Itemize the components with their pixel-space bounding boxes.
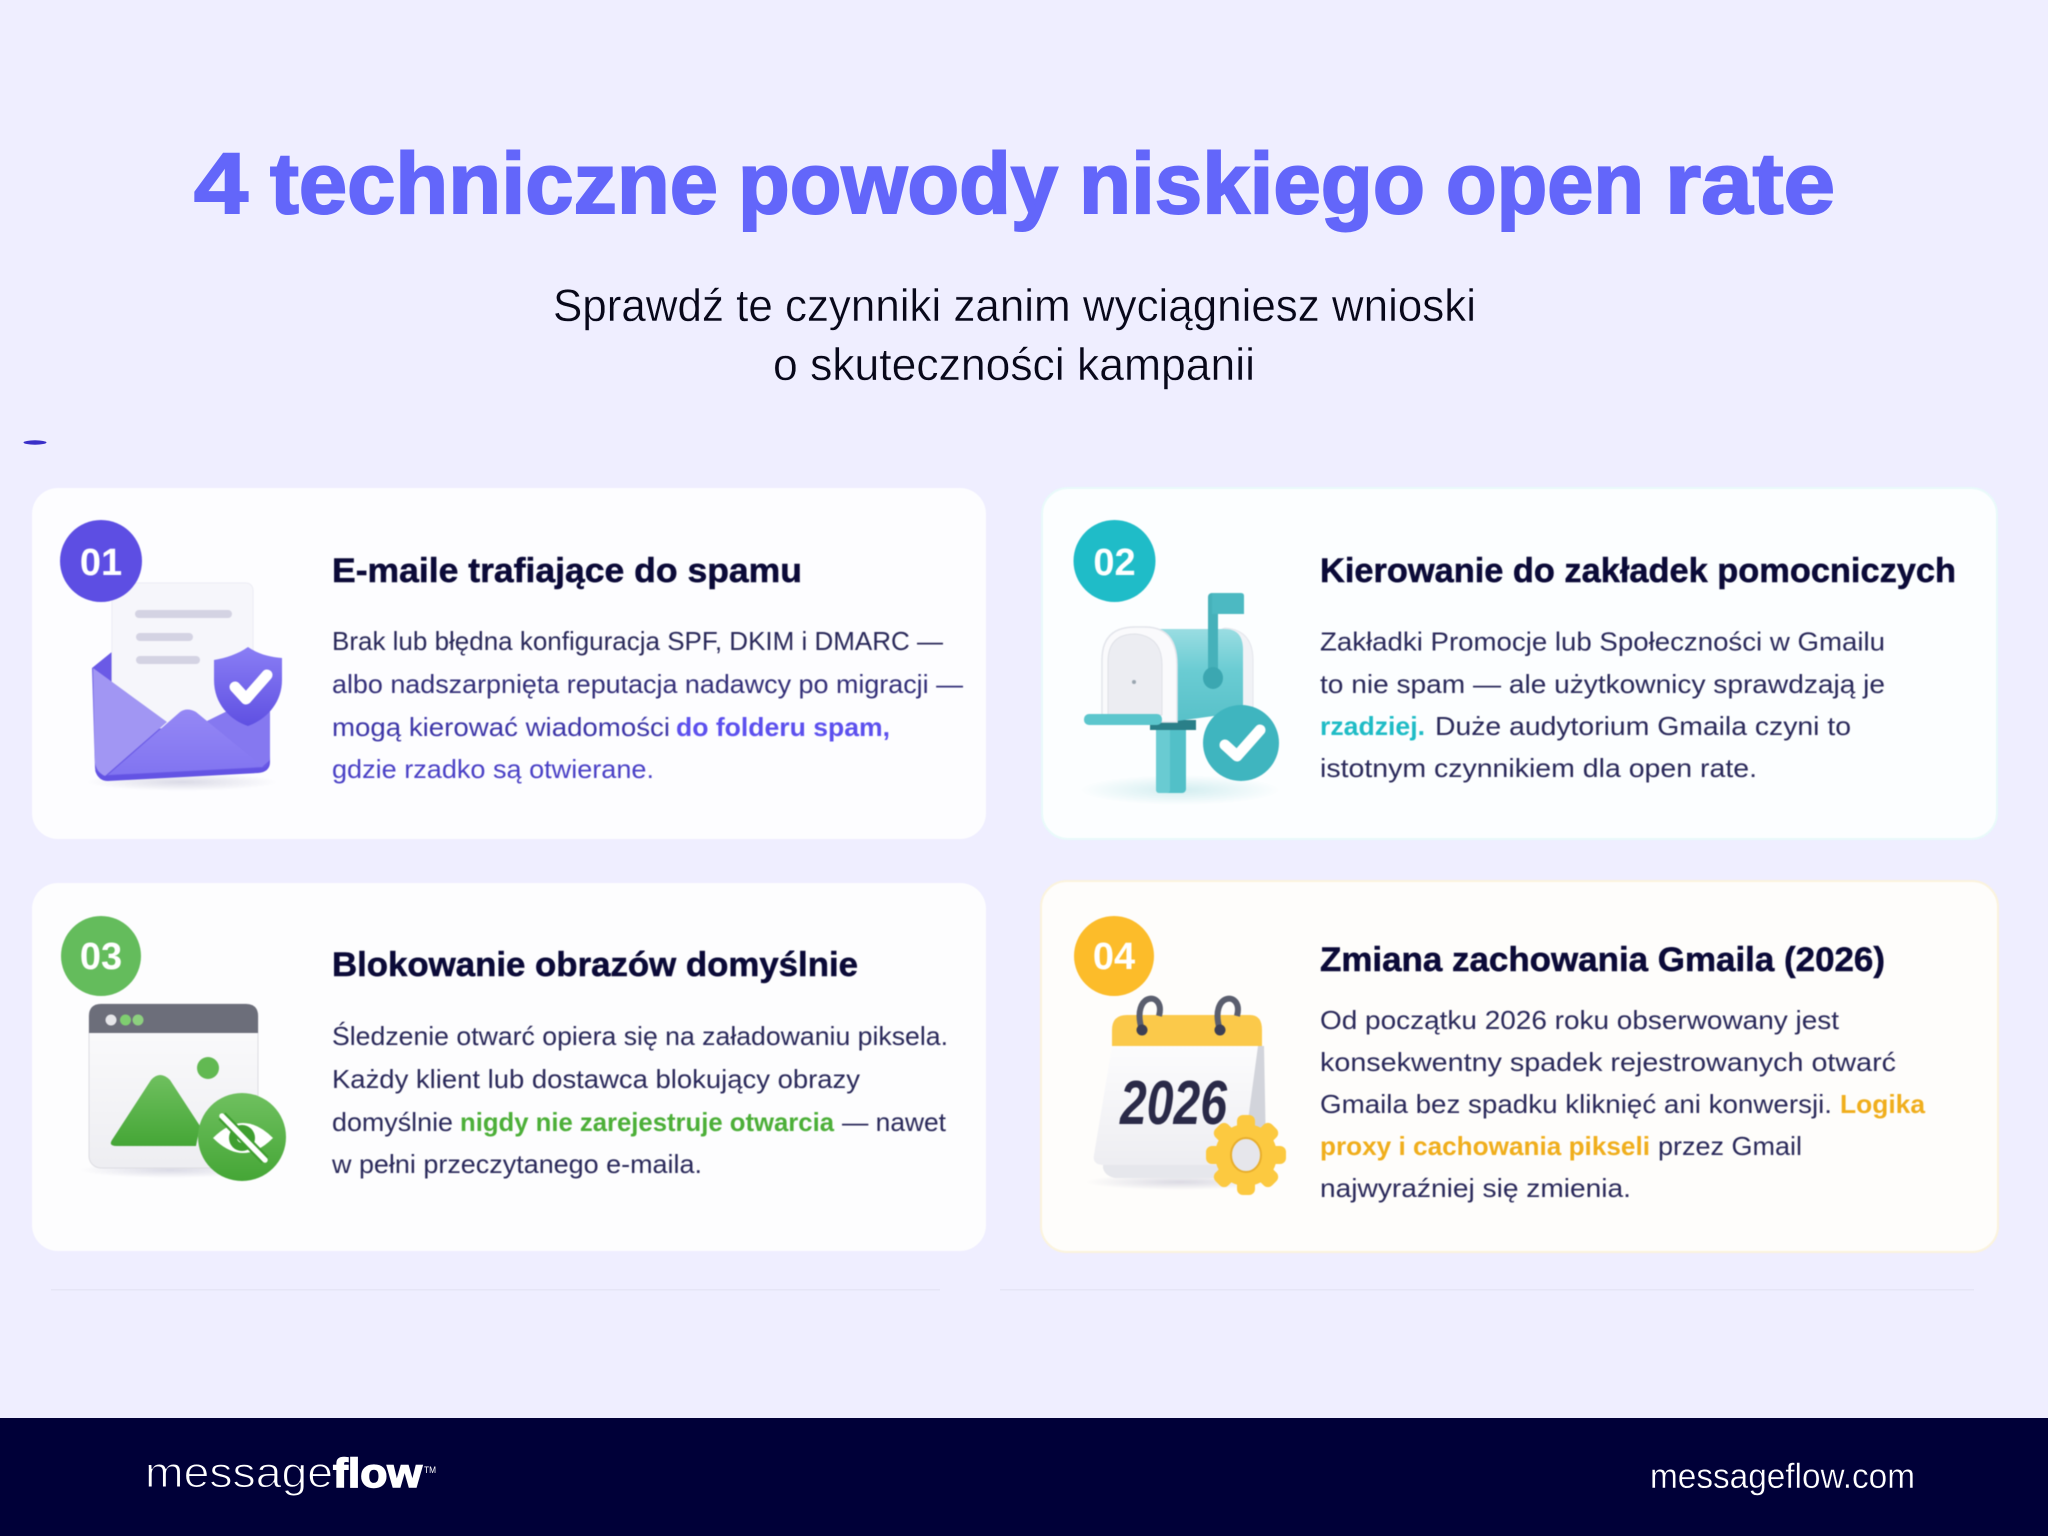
footer bar bbox=[0, 1418, 2048, 1536]
title: niskiego bbox=[1079, 136, 1425, 232]
body text 03: Każdy klient lub dostawca blokujący obrazy bbox=[332, 1064, 860, 1094]
panel: card 01 spam bbox=[32, 488, 986, 839]
subtitle: Sprawdź te czynniki zanim wyciągniesz wnioski bbox=[553, 280, 1476, 331]
body text 02: Duże audytorium Gmaila czyni to bbox=[1435, 711, 1851, 741]
title: open bbox=[1446, 136, 1644, 232]
subtitle bbox=[553, 280, 1476, 390]
icon: mailbox with check bbox=[1080, 593, 1280, 805]
title: 4 bbox=[194, 136, 248, 232]
subtitle: o skuteczności kampanii bbox=[773, 339, 1255, 390]
icon: calendar 2026 with gear: 2026 bbox=[1119, 1069, 1227, 1138]
body text 04: Od początku 2026 roku obserwowany jest bbox=[1320, 1005, 1840, 1035]
heading 03: Blokowanie obrazów domyślnie bbox=[332, 946, 858, 984]
number badge 01: 01 bbox=[80, 542, 122, 584]
heading 01: E-maile trafiające do spamu bbox=[332, 552, 802, 590]
number badge 04 bbox=[1074, 916, 1154, 996]
body text 04: konsekwentny spadek rejestrowanych otwarć bbox=[1320, 1047, 1896, 1077]
body text 02: Zakładki Promocje lub Społeczności w Gmailu bbox=[1320, 626, 1885, 656]
body text 03 bbox=[331, 1021, 948, 1179]
panel: card 04 gmail bbox=[1041, 881, 1998, 1252]
body text 04: Gmaila bez spadku kliknięć ani konwersji. bbox=[1320, 1089, 1832, 1119]
body text 03: — nawet bbox=[842, 1107, 947, 1137]
body text 02 bbox=[1320, 626, 1885, 783]
body text 04: proxy i cachowania pikseli bbox=[1320, 1131, 1650, 1161]
body text 01: mogą kierować wiadomości bbox=[332, 712, 670, 742]
body text 04 bbox=[1320, 1005, 1926, 1203]
body text 04: najwyraźniej się zmienia. bbox=[1320, 1173, 1631, 1203]
logo: messageflow bbox=[145, 1449, 436, 1497]
title: techniczne bbox=[270, 136, 718, 232]
logo: messageflow: TM bbox=[424, 1465, 436, 1475]
body text 01 bbox=[332, 626, 963, 784]
icon: calendar 2026 with gear bbox=[1085, 999, 1286, 1195]
body text 03: domyślnie bbox=[332, 1107, 453, 1137]
number badge 02: 02 bbox=[1093, 542, 1136, 584]
body text 01: gdzie rzadko są otwierane. bbox=[332, 754, 654, 784]
body text 02: to nie spam — ale użytkownicy sprawdzają je bbox=[1320, 669, 1885, 699]
logo: messageflow: message bbox=[145, 1449, 333, 1497]
number badge 03 bbox=[61, 916, 141, 996]
body text 03: Śledzenie otwarć opiera się na załadowaniu piksela. bbox=[332, 1021, 948, 1051]
body text 01: albo nadszarpnięta reputacja nadawcy po migracji — bbox=[332, 669, 963, 699]
heading 02: Kierowanie do zakładek pomocniczych bbox=[1320, 552, 1956, 590]
panel: card 02 tabs bbox=[1042, 488, 1997, 839]
body text 04: przez Gmail bbox=[1658, 1131, 1802, 1161]
logo: messageflow: flow bbox=[333, 1450, 422, 1496]
body text 03: nigdy nie zarejestruje otwarcia bbox=[460, 1107, 835, 1137]
panel: card 03 images bbox=[32, 883, 986, 1251]
body text 04: Logika bbox=[1840, 1089, 1926, 1119]
body text 02: rzadziej. bbox=[1320, 711, 1425, 741]
title: powody bbox=[738, 136, 1058, 232]
body text 02: istotnym czynnikiem dla open rate. bbox=[1320, 753, 1757, 783]
website url: messageflow.com bbox=[1650, 1457, 1915, 1496]
title: rate bbox=[1665, 136, 1835, 232]
number badge 04: 04 bbox=[1093, 936, 1135, 978]
number badge 02 bbox=[1074, 520, 1156, 602]
title bbox=[194, 136, 1835, 232]
decorative speck bbox=[24, 440, 46, 445]
heading 04: Zmiana zachowania Gmaila (2026) bbox=[1320, 941, 1885, 979]
number badge 03: 03 bbox=[80, 936, 122, 978]
icon: browser window with crossed eye bbox=[80, 1004, 286, 1181]
icon: envelope with shield bbox=[87, 583, 282, 791]
body text 03: w pełni przeczytanego e-maila. bbox=[331, 1149, 702, 1179]
number badge 01 bbox=[60, 520, 142, 602]
body text 01: Brak lub błędna konfiguracja SPF, DKIM i DMARC — bbox=[332, 626, 943, 656]
body text 01: do folderu spam, bbox=[676, 712, 890, 742]
